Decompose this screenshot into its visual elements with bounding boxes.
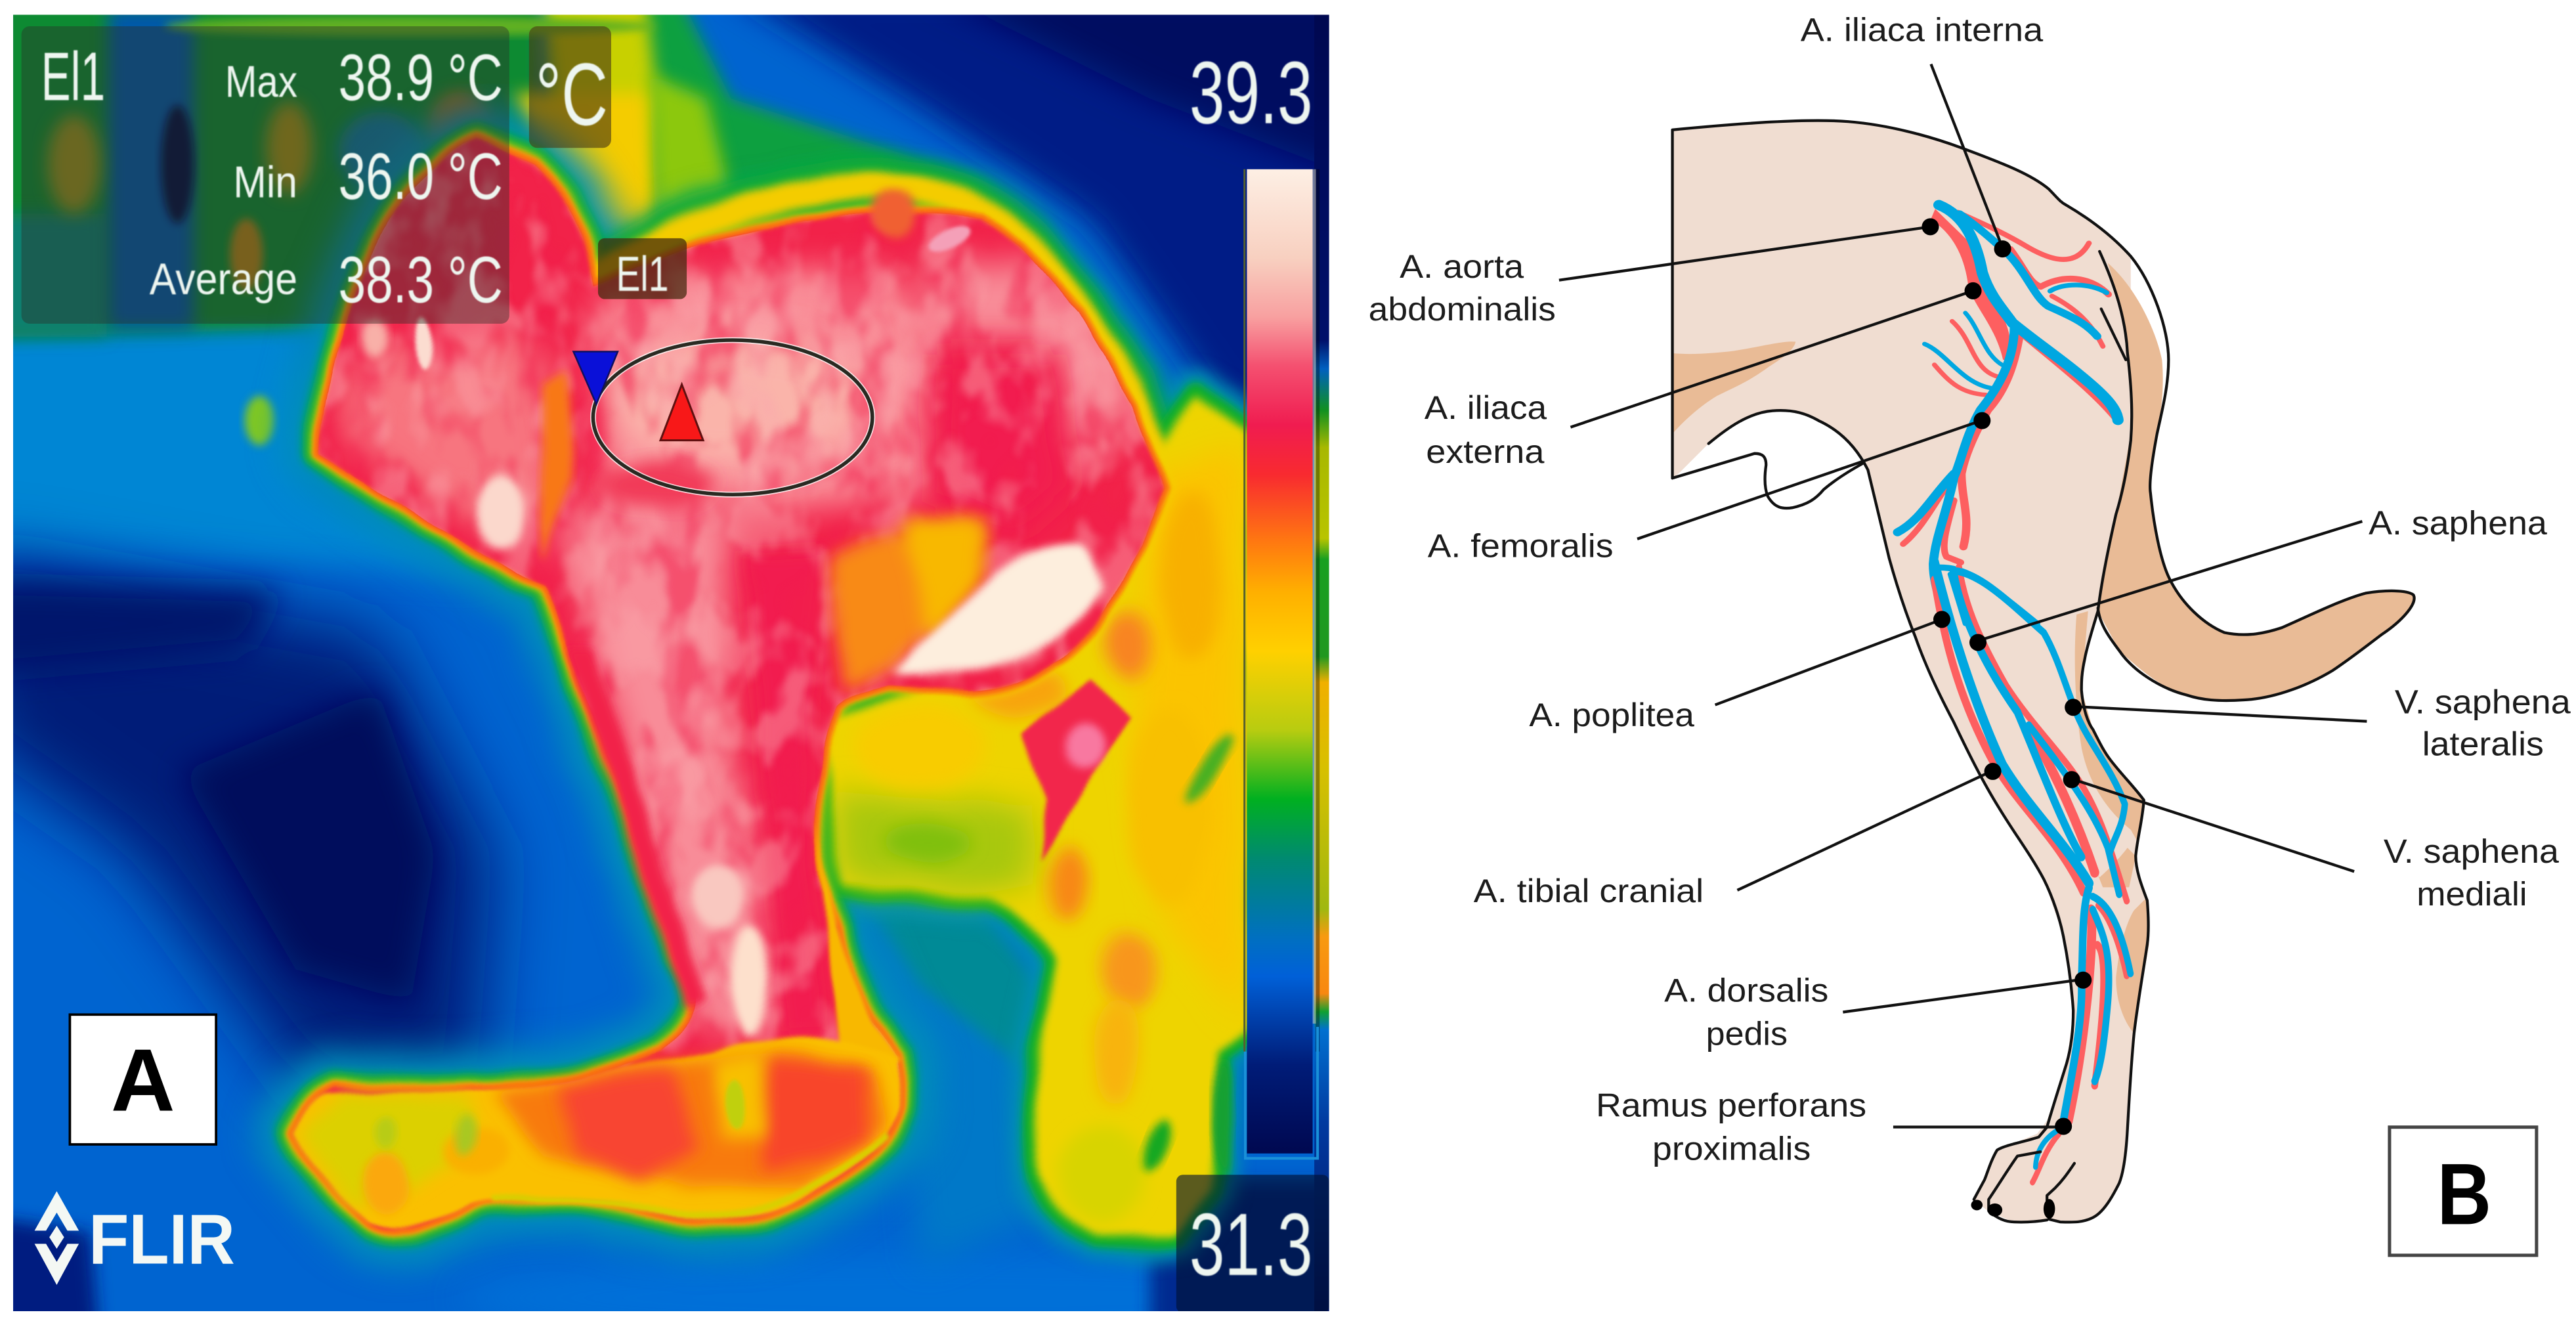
thermal readouts: 31.3 (1190, 1195, 1313, 1294)
arteries upper limb (1903, 209, 2118, 624)
thermal readouts: Max (225, 58, 297, 107)
minimum value overlay box (1176, 1175, 1329, 1312)
anatomical labels: A. iliaca interna (1801, 12, 2043, 49)
panel letter A (70, 1014, 216, 1144)
anatomical labels: mediali (2416, 875, 2527, 913)
measurement overlay box (22, 26, 509, 324)
anatomical labels: A. femoralis (1428, 527, 1613, 564)
anatomical labels (1369, 12, 2571, 1167)
limb outlines (1673, 121, 2415, 1222)
hot hind limb and pelvis (278, 125, 1172, 1245)
anatomical labels: A. poplitea (1529, 697, 1694, 733)
veins lower limb (1935, 563, 2130, 1167)
anatomical labels: proximalis (1652, 1130, 1811, 1167)
leader lines (1559, 64, 2367, 1127)
thermal readouts: 38.3 °C (339, 243, 503, 316)
panel B: vascular anatomy of the hind limb (1369, 12, 2571, 1255)
thermal readouts: Min (233, 158, 297, 207)
veins upper limb (1897, 205, 2118, 624)
warm body on the right (821, 395, 1249, 1236)
anatomical labels: A. saphena (2369, 504, 2547, 542)
hot paw (292, 1039, 900, 1226)
thermal readouts: El1 (41, 39, 105, 116)
panel letter B: B (2437, 1146, 2491, 1243)
arteries lower limb (1935, 567, 2127, 1182)
anatomical labels: A. tibial cranial (1474, 873, 1704, 909)
thermal readouts: 36.0 °C (339, 140, 503, 213)
panel letter A: A (111, 1031, 175, 1130)
thermal readouts (41, 39, 1313, 1294)
vessel location dots (1921, 218, 2092, 1135)
thermal background (13, 14, 1329, 1311)
thermal heat halo around the animal (292, 140, 1249, 1236)
anatomical labels: pedis (1706, 1015, 1788, 1052)
ellipse tag overlay box (598, 238, 687, 299)
thermal readouts: 38.9 °C (339, 41, 503, 115)
thermal readouts: °C (536, 45, 608, 144)
lower limb vessels (1935, 563, 2130, 1182)
icon: hottest point marker (660, 385, 703, 441)
back of thigh fur patch (1673, 341, 1795, 434)
toe claws (1971, 1199, 2055, 1219)
anatomical labels: lateralis (2422, 725, 2544, 762)
panel letter B (2390, 1127, 2537, 1255)
anatomical labels: A. dorsalis (1664, 972, 1828, 1009)
icon: coldest point marker (573, 352, 618, 404)
tail and thigh tan shape (2098, 263, 2415, 701)
anatomical labels: A. aorta (1400, 248, 1524, 285)
upper limb vessels (1897, 205, 2118, 624)
measurement ellipse (593, 340, 872, 494)
anatomical labels: externa (1426, 433, 1545, 470)
unit overlay box (529, 26, 611, 148)
colour scale bar (1245, 15, 1329, 1311)
panel A: thermal image (13, 14, 1329, 1311)
thermal readouts: El1 (616, 246, 669, 301)
anatomical labels: A. iliaca (1425, 389, 1547, 426)
anatomical labels: abdominalis (1369, 291, 1556, 328)
thermal readouts: 39.3 (1190, 43, 1313, 142)
thermal readouts: Average (150, 255, 297, 304)
anatomical labels: V. saphena (2384, 833, 2559, 870)
hock fur patches (2073, 611, 2149, 1033)
limb skin shape (1673, 121, 2147, 1223)
anatomical labels: V. saphena (2395, 683, 2571, 721)
warm animal body (246, 98, 1249, 1236)
anatomical labels: Ramus perforans (1596, 1087, 1866, 1123)
FLIR logo (35, 1191, 235, 1285)
FLIR logo: FLIR (89, 1200, 235, 1278)
